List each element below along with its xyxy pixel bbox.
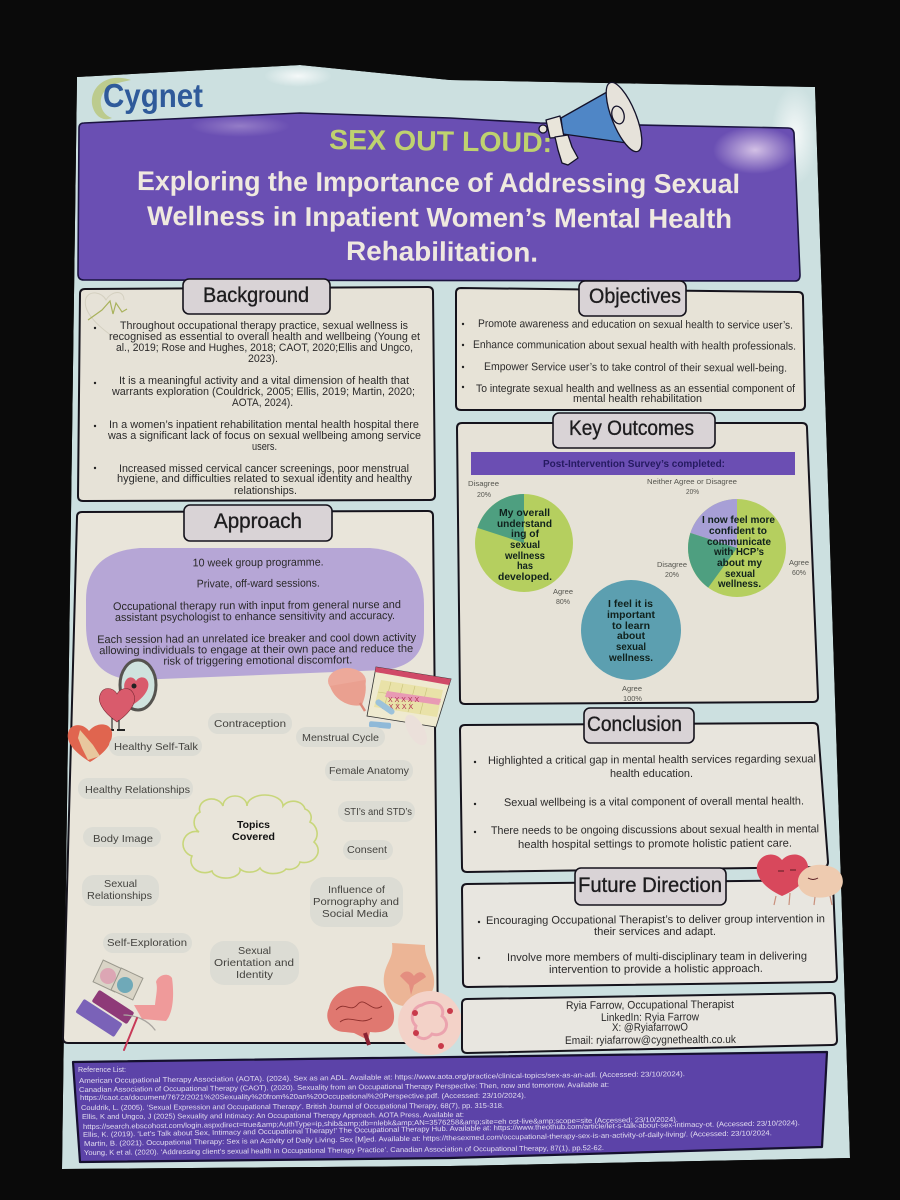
topic: sexual relationships: Sexual [104, 878, 137, 890]
panel: background [78, 279, 435, 501]
topic: body image [83, 827, 161, 847]
panel: key outcomes [457, 413, 818, 704]
panel: reference list: Young, K et al. (2020). ‘Addressing client’s sexual health in Occupational Therapy Practice’. Canadian Association of Occupational Therapy, 87(1), pp.52-62. [84, 1145, 604, 1157]
pie chart: understanding: wellness [504, 551, 545, 562]
pie chart: confidence: I now feel more [702, 515, 775, 526]
pie chart: understanding: understand [497, 519, 552, 530]
topic: sexual orientation and identity: Sexual [238, 945, 271, 957]
icon: IUD [124, 1015, 155, 1050]
topic: STIs and STDs [338, 801, 415, 822]
approach summary block: 10 week group programme. [193, 557, 324, 569]
topic: influence of pornography and social media [310, 877, 403, 927]
subtitle: Wellness in Inpatient Women’s Mental Health [147, 201, 732, 234]
survey banner: Post-Intervention Survey’s completed: [543, 458, 725, 470]
panel: reference list [73, 1052, 827, 1162]
topics cloud: Covered [232, 832, 275, 843]
pie chart: importance: about [617, 631, 646, 642]
panel: reference list: https://caot.ca/document/7672/2021%20Sexuality%20from%20an%20Occupational%20Perspective.pdf. (Accessed: 23/10/2024). [80, 1093, 526, 1102]
icon: condoms [93, 960, 143, 1000]
topic: consent: Consent [347, 844, 387, 856]
pie chart: confidence: 20% [665, 570, 679, 579]
topic: body image: Body Image [93, 833, 153, 845]
icon: contraceptive pills [75, 990, 134, 1037]
objectives text: mental health rehabilitation [573, 393, 702, 405]
background text: It is a meaningful activity and a vital dimension of health that [119, 375, 409, 387]
approach summary block: Occupational therapy run with input from general nurse and [113, 599, 401, 613]
pie chart: confidence: 20% [686, 487, 699, 496]
icon: hands in heart [68, 724, 112, 762]
approach summary block: assistant psychologist to enhance sensitivity and accuracy. [115, 610, 395, 624]
topic: sexual orientation and identity: Identity [236, 969, 274, 981]
panel: contact details: Ryia Farrow, Occupational Therapist [566, 999, 734, 1012]
pie chart: understanding: 80% [556, 597, 570, 606]
future direction text: Encouraging Occupational Therapist’s to deliver group intervention in [486, 913, 825, 927]
topic map [78, 713, 415, 985]
topic: contraception: Contraception [214, 718, 286, 730]
icon: pelvis anatomy [384, 943, 434, 1006]
icon: heart hugging brain [757, 854, 843, 905]
background text: hygiene, and difficulties related to sexual identity and healthy [117, 473, 412, 485]
topic: influence of pornography and social media: Social Media [322, 908, 388, 920]
topic: self-exploration: Self-Exploration [107, 937, 187, 949]
pie chart: understanding: sexual [510, 540, 540, 551]
pie chart: confidence: wellness. [717, 579, 761, 590]
panel: objectives [456, 281, 805, 410]
background text: Increased missed cervical cancer screenings, poor menstrual [119, 463, 409, 475]
panel: reference list: Ellis, K and Ungco, J (2025) Sexuality and Intimacy: An Occupational Therapy Approach. AOTA Press. Available at: [82, 1112, 464, 1121]
background text: Throughout occupational therapy practice, sexual wellness is [120, 320, 408, 332]
title line: Sex Out Loud: SEX OUT LOUD: [329, 124, 552, 158]
background text: was a significant lack of focus on sexual wellbeing among service [107, 430, 421, 442]
pie chart: confidence: Disagree [657, 560, 687, 569]
subtitle: Rehabilitation. [346, 236, 538, 268]
topic: influence of pornography and social media: Influence of [328, 884, 385, 896]
background text: relationships. [234, 485, 297, 497]
topic: female anatomy [325, 760, 413, 781]
future direction text [478, 913, 825, 976]
panel: approach [63, 505, 462, 1055]
topic: sexual relationships [82, 875, 159, 906]
icon: calendar and period products: X X X X X [382, 704, 413, 711]
pie chart: confidence [647, 477, 809, 597]
background text: users. [252, 441, 277, 453]
heading tab: approach [184, 505, 332, 541]
background text: recognised as essential to overall health and wellbeing (Young et [109, 331, 420, 343]
pie chart: understanding: developed. [498, 572, 552, 583]
icon: calendar and period products [367, 667, 451, 749]
pie chart: confidence: confident to [709, 526, 767, 537]
topic: healthy self-talk [109, 736, 202, 756]
heading tab: future direction [575, 868, 726, 905]
panel: contact details [462, 993, 837, 1053]
panel: reference list: Ellis, K. (2019). ‘Let’s Talk about Sex, Intimacy and Occupational Therapy!’ The Occupational Therapy Hub. Available at: https://www.theothub.com/article/let-s-talk-about-sex-intimacy-ot. (Accessed: 23/10/2024). [83, 1120, 800, 1139]
heading tab: key outcomes [553, 413, 715, 448]
icon: magnified tissue circle [398, 991, 462, 1055]
pie chart: understanding: has [517, 561, 533, 572]
topic: sexual relationships: Relationships [87, 890, 152, 902]
topic: healthy relationships: Healthy Relationships [85, 784, 190, 796]
topics cloud [183, 795, 318, 878]
heading tab: conclusion: Conclusion [587, 713, 682, 736]
pie chart: importance: Agree [622, 684, 642, 693]
topic: healthy self-talk: Healthy Self-Talk [114, 741, 199, 753]
survey banner [471, 452, 795, 475]
icon: brain [327, 986, 394, 1045]
conclusion text: Sexual wellbeing is a vital component of overall mental health. [504, 795, 804, 809]
panel: contact details: LinkedIn: Ryia Farrow [601, 1011, 699, 1024]
topic: consent [343, 840, 393, 860]
objectives text: Enhance communication about sexual health with health professionals. [473, 339, 796, 353]
panel: conclusion [460, 708, 828, 872]
icon: heartbeat line [85, 292, 127, 340]
topic: influence of pornography and social media: Pornography and [313, 896, 399, 908]
topic: female anatomy: Female Anatomy [329, 765, 410, 777]
pie chart: confidence: about my [717, 558, 762, 569]
pie chart: importance: wellness. [608, 653, 653, 664]
heading tab: future direction: Future Direction [578, 874, 722, 897]
pie chart: confidence: communicate [707, 537, 771, 548]
future direction text: Involve more members of multi-disciplinary team in delivering [507, 950, 807, 964]
topic: sexual orientation and identity [210, 941, 299, 985]
approach summary block: Each session had an unrelated ice breaker and cool down activity [97, 632, 417, 646]
background text [94, 320, 421, 497]
panel: reference list: Couldrik, L. (2005). ‘Sexual Expression and Occupational Therapy’. British Journal of Occupational Therapy, 68(7), pp. 315-318. [81, 1103, 504, 1112]
approach summary block: Private, off-ward sessions. [197, 578, 320, 590]
pie chart: importance: important [607, 610, 656, 621]
conclusion text: There needs to be ongoing discussions about sexual health in mental [491, 823, 819, 837]
pie chart: confidence: with HCP’s [713, 547, 764, 558]
icon: heart and mirror [99, 660, 156, 730]
panel: reference list: Reference List: [78, 1067, 126, 1074]
panel: reference list: American Occupational Therapy Association (AOTA). (2024). Sex as an ADL. Available at: https://www.aota.org/practice/clinical-topics/sex-as-an-adl. (Accessed: 23/10/2024). [79, 1071, 685, 1085]
topics cloud: Topics [237, 820, 270, 831]
pie chart: confidence: Neither Agree or Disagree [647, 477, 737, 486]
objectives text: Promote awareness and education on sexual health to service user’s. [478, 318, 793, 332]
approach summary block [86, 548, 424, 680]
icon: calendar and period products: X X X X X [388, 697, 419, 704]
pie chart: understanding [468, 479, 573, 606]
panel: contact details: X: @RyiafarrowO [612, 1021, 688, 1034]
topic: STIs and STDs: STI’s and STD’s [344, 806, 412, 818]
icon: menstrual cup [328, 668, 366, 711]
pie chart: importance: sexual [616, 642, 646, 653]
conclusion text: health education. [610, 768, 693, 780]
panel: contact details: Email: ryiafarrow@cygnethealth.co.uk [565, 1034, 736, 1047]
approach summary block: risk of triggering emotional discomfort. [163, 654, 352, 668]
panel: reference list: Canadian Association of Occupational Therapy (CAOT). (2020). Sexuality from an Occupational Therapy Perspective: Then, now and tomorrow. Available at: [79, 1082, 609, 1094]
subtitle [137, 166, 740, 268]
background text: 2023). [248, 353, 278, 365]
topic: healthy relationships [78, 778, 193, 799]
conclusion text [474, 753, 819, 851]
pie chart: understanding: Disagree [468, 479, 499, 488]
pie chart: understanding: 20% [477, 490, 491, 499]
icon: megaphone [539, 78, 649, 165]
heading tab: approach: Approach [214, 510, 302, 533]
icon: flexed arm [134, 975, 173, 1021]
background text: AOTA, 2024). [232, 397, 293, 409]
pie chart: importance: I feel it is [608, 599, 653, 610]
pie chart: understanding: ing of [511, 529, 540, 540]
topic: menstrual cycle [296, 727, 385, 747]
topic: self-exploration [103, 933, 192, 953]
pie chart: importance [581, 580, 681, 703]
title banner [78, 113, 800, 281]
heading tab: key outcomes: Key Outcomes [569, 417, 694, 440]
pie chart: importance: 100% [623, 694, 642, 703]
pie chart: understanding: My overall [499, 508, 550, 519]
heading tab: objectives [579, 281, 686, 316]
background text: warrants exploration (Couldrick, 2005; Ellis, 2019; Martin, 2020; [111, 386, 415, 398]
background text: In a women’s inpatient rehabilitation mental health hospital there [109, 419, 419, 431]
heading tab: background: Background [203, 284, 309, 307]
objectives text [462, 318, 796, 405]
pie chart: confidence: sexual [725, 569, 755, 580]
pie chart: understanding: Agree [553, 587, 573, 596]
heading tab: objectives: Objectives [589, 285, 681, 308]
subtitle: Exploring the Importance of Addressing Sexual [137, 166, 740, 199]
logo: Cygnet: Cygnet [103, 77, 203, 114]
conclusion text: Highlighted a critical gap in mental health services regarding sexual [488, 753, 816, 767]
future direction text: intervention to provide a holistic approach. [549, 963, 763, 976]
pie chart: importance: to learn [612, 621, 650, 632]
conclusion text: health hospital settings to promote holistic patient care. [518, 838, 792, 851]
topic: contraception [208, 713, 292, 734]
heading tab: conclusion [584, 708, 694, 743]
future direction text: their services and adapt. [594, 926, 716, 938]
panel: reference list: https://search.ebscohost.com/login.aspxdirect=true&amp;AuthType=ip,shib&amp;db=nlebk&amp;AN=3576258&amp;site=eh ost-live&amp;scope=site (Accessed: 23/10/2024). [83, 1117, 678, 1131]
topic: menstrual cycle: Menstrual Cycle [302, 732, 379, 744]
pie chart: confidence: 60% [792, 568, 806, 577]
objectives text: To integrate sexual health and wellness as an essential component of [476, 383, 796, 395]
background text: al., 2019; Rose and Hughes, 2018; CAOT, 2020;Ellis and Ungco, [116, 342, 413, 354]
panel: reference list: Martin, B. (2021). Occupational Therapy: Sex is an Activity of Daily Living. Sex [M]ed. Available at: https://thesexmed.com/occupational-therapy-sex-is-an-activity-of-daily-living/. (Accessed: 23/10/2024. [84, 1130, 772, 1148]
topic: sexual orientation and identity: Orientation and [214, 957, 294, 969]
panel: future direction [462, 868, 837, 987]
pie chart: confidence: Agree [789, 558, 809, 567]
approach summary block: allowing individuals to engage at their own pace and reduce the [99, 643, 413, 657]
heading tab: background [183, 279, 330, 314]
objectives text: Empower Service user’s to take control of their sexual well-being. [484, 361, 787, 375]
